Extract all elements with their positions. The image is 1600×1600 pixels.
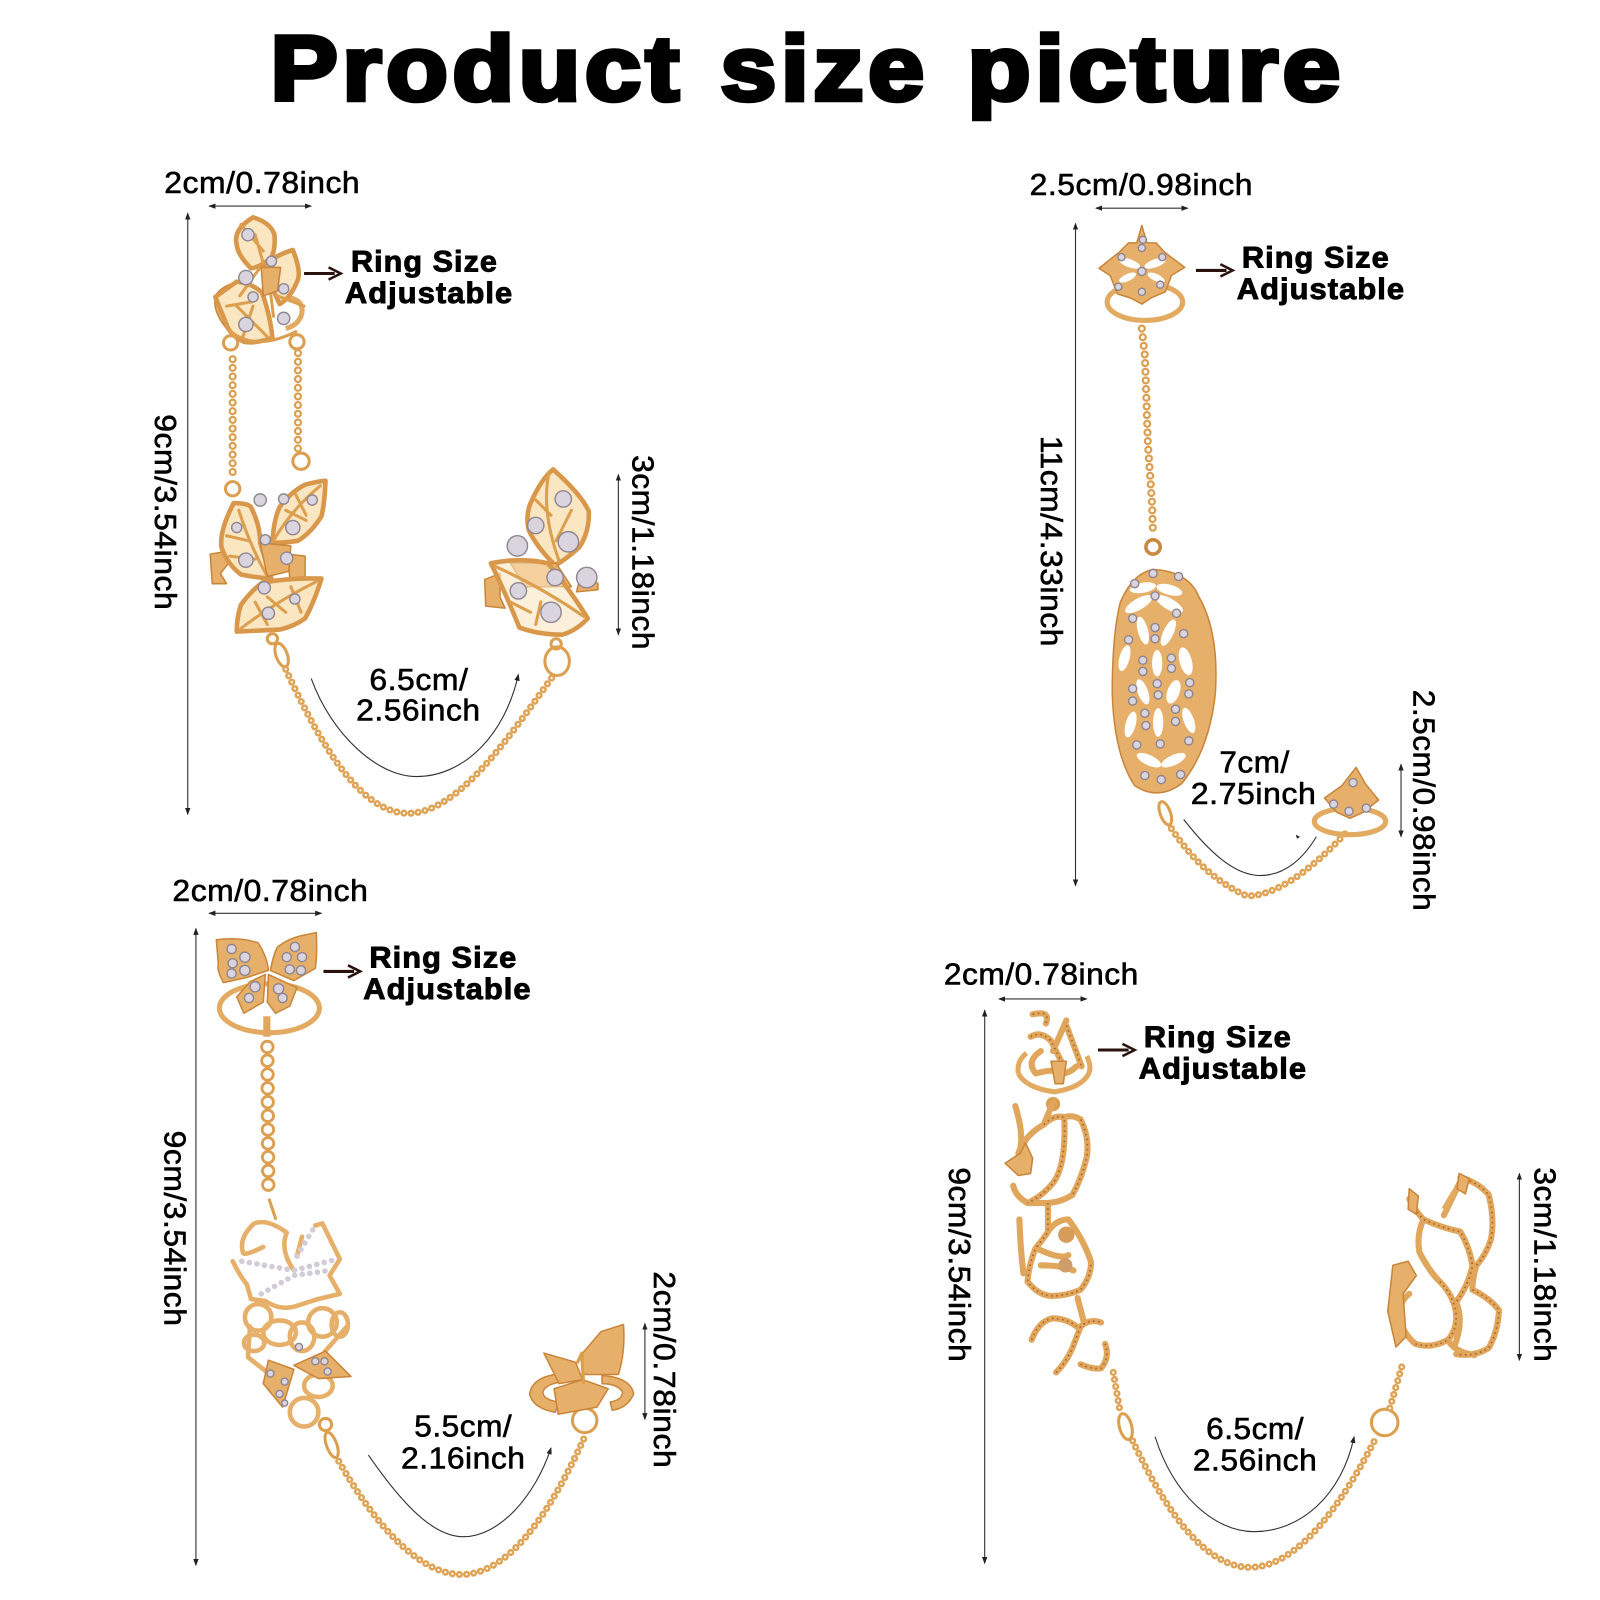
arc label: 6.5cm/2.56inch: 6.5cm/ — [1206, 1412, 1304, 1446]
arrow: arc length curve — [368, 1448, 551, 1537]
jewelry: small flower ring — [1314, 767, 1386, 835]
jewelry: twin upper chains — [223, 335, 309, 496]
jewelry: vine filigree panel — [1005, 1097, 1091, 1296]
width label: 2cm/0.78inch: 2cm/0.78inch — [172, 874, 368, 908]
arrow: total length — [984, 1010, 986, 1563]
callout: ring size adjustable: Ring Size — [1144, 1021, 1292, 1054]
length label: 9cm/3.54inch: 9cm/3.54inch — [148, 414, 182, 610]
callout: ring size adjustable: Ring Size — [1242, 241, 1390, 274]
jewelry: lower chain — [1113, 1362, 1403, 1567]
height label: 3cm/1.18inch: 3cm/1.18inch — [1528, 1167, 1562, 1362]
callout: ring size adjustable — [1237, 241, 1405, 306]
callout: ring size adjustable: Adjustable — [363, 973, 532, 1006]
arc label: 7cm/2.75inch — [1191, 745, 1316, 811]
callout: ring size adjustable: Adjustable — [345, 277, 513, 310]
arc label: 5.5cm/2.16inch — [401, 1410, 526, 1475]
panel: filigree flower ring set — [1030, 168, 1440, 911]
jewelry: lower chain — [319, 1408, 597, 1575]
arrow: arc length curve — [311, 674, 518, 777]
panel: leaf ring set — [148, 166, 660, 814]
jewelry: top flower ring — [1099, 226, 1185, 320]
arrow: arc length curve — [1155, 1437, 1354, 1532]
callout: ring size adjustable: Adjustable — [1237, 273, 1405, 306]
height label: 2cm/0.78inch: 2cm/0.78inch — [647, 1271, 681, 1468]
jewelry: lower chain — [1156, 800, 1349, 896]
arrow: total length — [187, 213, 189, 814]
arrow: small ring height — [617, 474, 619, 635]
arc label: 7cm/2.75inch: 7cm/ — [1219, 745, 1290, 779]
callout: ring size adjustable: Adjustable — [1139, 1053, 1307, 1086]
panel: butterfly ring set — [157, 874, 681, 1575]
jewelry: right vine ring — [1388, 1173, 1499, 1355]
width label: 2cm/0.78inch: 2cm/0.78inch — [164, 166, 360, 200]
height label: 2.5cm/0.98inch: 2.5cm/0.98inch — [1406, 690, 1440, 911]
panel: vine ring set — [942, 958, 1562, 1567]
arrow: small ring height — [1400, 764, 1402, 837]
callout: ring size adjustable — [345, 245, 513, 310]
height label: 3cm/1.18inch: 3cm/1.18inch — [626, 455, 660, 650]
jewelry: right leaf ring — [485, 469, 598, 635]
arc label: 6.5cm/2.56inch: 2.56inch — [356, 693, 481, 727]
jewelry: upper chain — [1142, 329, 1160, 554]
arrow: right ring height — [1518, 1173, 1520, 1360]
jewelry: small butterfly ring — [530, 1324, 634, 1414]
arrow: ring width — [1096, 207, 1188, 209]
jewelry: top leaf ring — [215, 217, 304, 342]
length label: 11cm/4.33inch: 11cm/4.33inch — [1034, 436, 1068, 647]
arc label: 6.5cm/2.56inch — [1193, 1412, 1317, 1477]
jewelry: butterfly filigree panel — [233, 1222, 351, 1427]
arrow: small ring height — [644, 1323, 646, 1419]
width label: 2cm/0.78inch: 2cm/0.78inch — [944, 958, 1139, 992]
arrow: ring size pointer — [323, 965, 360, 978]
callout: ring size adjustable — [363, 941, 532, 1006]
callout: ring size adjustable: Ring Size — [351, 245, 498, 278]
width label: 2.5cm/0.98inch: 2.5cm/0.98inch — [1030, 168, 1253, 202]
length label: 9cm/3.54inch: 9cm/3.54inch — [942, 1167, 976, 1362]
arrow: ring size pointer — [1098, 1044, 1135, 1056]
arc label: 5.5cm/2.16inch: 2.16inch — [401, 1441, 526, 1475]
jewelry: top vine ring — [1018, 1013, 1090, 1092]
jewelry: lower chain — [267, 634, 569, 813]
jewelry: upper chain — [267, 1047, 276, 1218]
arrow: total length — [195, 929, 197, 1565]
title: size — [720, 18, 929, 120]
arc label: 5.5cm/2.16inch: 5.5cm/ — [414, 1410, 512, 1444]
length label: 9cm/3.54inch: 9cm/3.54inch — [157, 1131, 191, 1327]
arc label: 6.5cm/2.56inch: 2.56inch — [1193, 1443, 1317, 1477]
callout: ring size adjustable: Ring Size — [369, 941, 517, 974]
arrow: ring width — [999, 998, 1087, 1000]
jewelry: vine scroll tail — [1032, 1298, 1107, 1372]
callout: ring size adjustable — [1139, 1021, 1307, 1086]
arc label: 6.5cm/2.56inch — [356, 663, 481, 727]
arc label: 7cm/2.75inch: 2.75inch — [1191, 777, 1316, 811]
arrow: ring width — [209, 912, 321, 914]
title: Product — [270, 18, 684, 120]
jewelry: butterfly ring — [216, 933, 319, 1037]
arrow: total length — [1075, 223, 1077, 886]
jewelry: oval filigree panel — [1112, 569, 1216, 793]
arrow: ring size pointer — [1196, 264, 1233, 277]
arrow: ring size pointer — [304, 267, 341, 280]
arrow: arc length curve — [1184, 819, 1316, 876]
arrow: ring width — [209, 205, 311, 207]
title: picture — [967, 18, 1345, 120]
title — [270, 18, 1345, 120]
arc label: 6.5cm/2.56inch: 6.5cm/ — [369, 663, 468, 697]
jewelry: middle leaf piece — [210, 481, 326, 632]
